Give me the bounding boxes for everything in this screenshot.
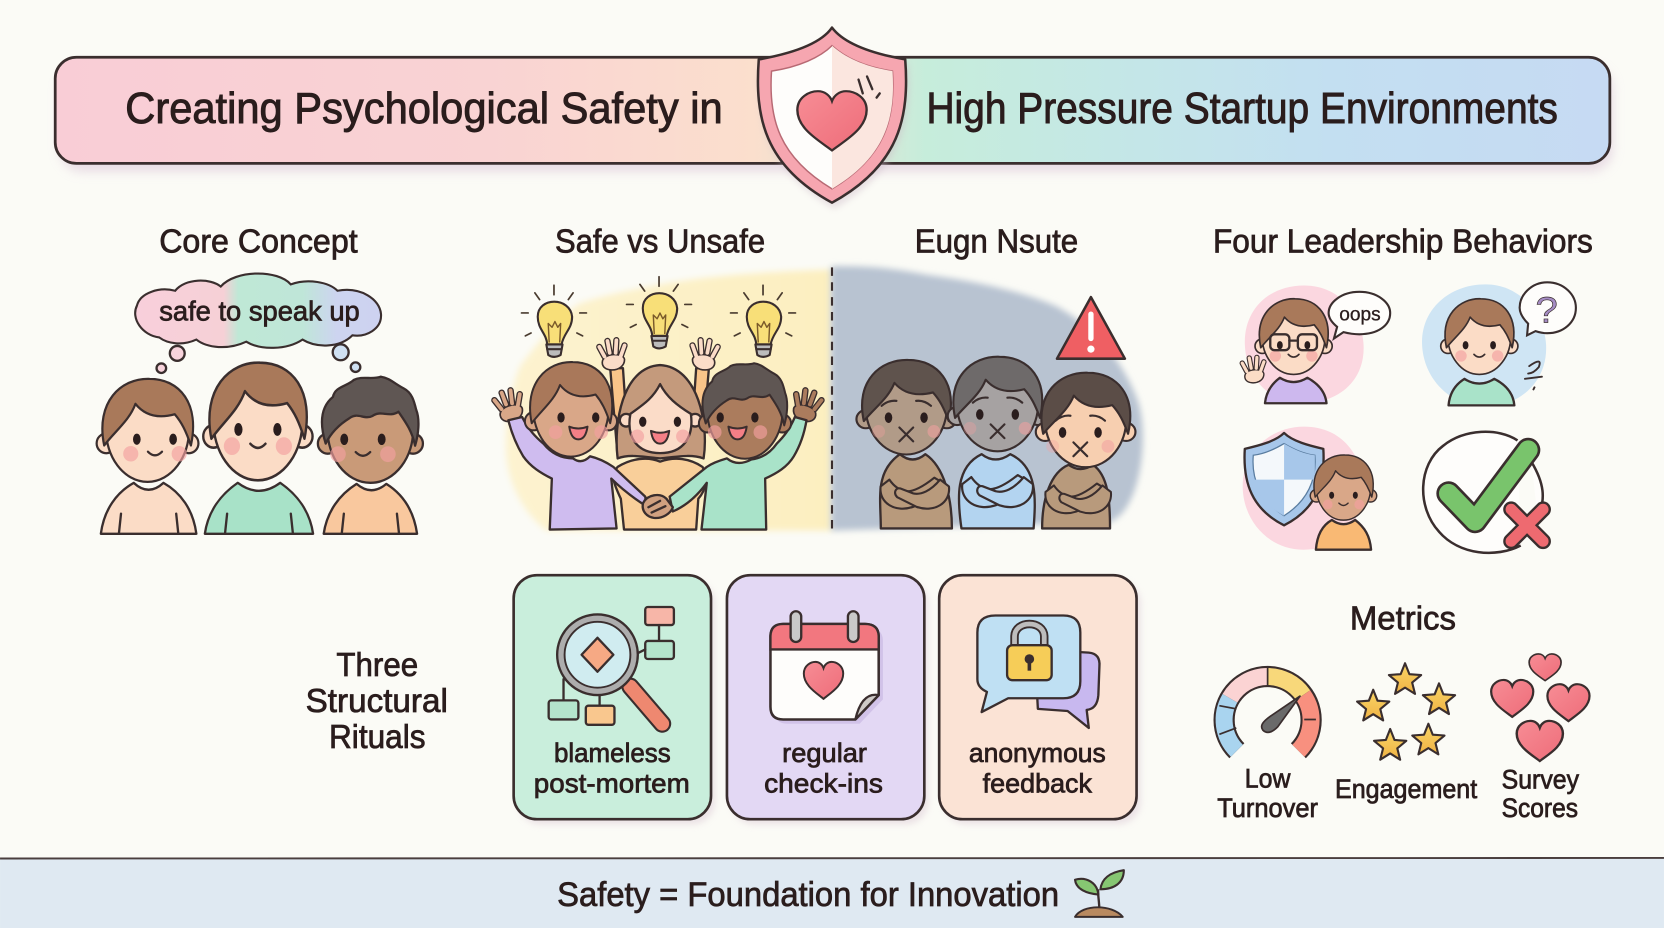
heading: metrics: Metrics <box>1350 599 1456 636</box>
metric: low turnover gauge: Low <box>1245 763 1291 793</box>
card: blameless post-mortem <box>514 575 715 825</box>
card: regular check-ins: regular <box>782 738 867 768</box>
speech bubble: question mark: ? <box>1536 290 1558 331</box>
handshake <box>643 495 673 518</box>
metric: survey scores hearts <box>1491 654 1590 823</box>
metric: engagement stars: Engagement <box>1335 774 1478 804</box>
person: unsafe right <box>1036 373 1135 528</box>
icon: warning triangle <box>1057 297 1125 359</box>
person: left raising arm <box>493 362 646 530</box>
person: middle <box>203 363 313 534</box>
panel: unsafe side <box>831 266 1143 531</box>
card: blameless post-mortem: blameless <box>554 738 671 768</box>
metric: engagement stars <box>1335 663 1478 804</box>
behavior: admit mistakes <box>1242 285 1390 403</box>
yellow glow background <box>506 270 832 531</box>
panel: four leadership behaviors <box>1242 282 1576 553</box>
metric: low turnover gauge <box>1217 667 1318 823</box>
card: regular check-ins: check-ins <box>764 769 883 799</box>
heading: three structural rituals <box>306 646 448 755</box>
person: girl centre <box>599 340 718 530</box>
heading: safe vs unsafe: Safe vs Unsafe <box>555 223 765 260</box>
title left: Creating Psychological Safety in <box>125 85 723 133</box>
card: anonymous feedback: feedback <box>983 769 1093 799</box>
card: regular check-ins <box>727 575 929 825</box>
card: anonymous feedback: anonymous <box>969 738 1106 768</box>
speech bubble: question mark <box>1520 282 1576 335</box>
person: unsafe middle <box>948 357 1047 528</box>
thought cloud: safe to speak up <box>159 295 360 326</box>
footer band <box>0 858 1664 928</box>
person: left <box>97 379 198 534</box>
behavior: ask questions <box>1422 282 1576 406</box>
person: right raising arm <box>670 363 823 530</box>
heading: three structural rituals: Three <box>336 646 418 683</box>
title right: High Pressure Startup Environments <box>926 85 1558 133</box>
card: anonymous feedback <box>939 575 1141 825</box>
icon: calendar with heart <box>770 611 883 724</box>
card: blameless post-mortem: post-mortem <box>534 769 690 799</box>
blue-grey shadow background <box>831 266 1143 531</box>
behavior: protect the team <box>1243 427 1377 550</box>
panel: core concept <box>97 274 423 534</box>
person: right <box>318 377 423 534</box>
metric: survey scores hearts: Scores <box>1502 793 1578 823</box>
icon: magnifier with flow chart <box>549 607 674 725</box>
behavior: check and cross <box>1423 432 1543 553</box>
divider: dashed line <box>831 267 833 532</box>
metric: survey scores hearts: Survey <box>1502 764 1580 794</box>
speech bubble: oops <box>1329 292 1390 339</box>
heading: three structural rituals: Structural <box>306 682 448 719</box>
thought cloud <box>135 274 381 373</box>
footer message: Safety = Foundation for Innovation <box>557 876 1059 914</box>
icon: sprout <box>1075 870 1124 917</box>
panel: safe side <box>493 270 832 531</box>
icon: speech bubbles with lock <box>977 615 1100 728</box>
speech bubble: oops: oops <box>1339 304 1381 325</box>
person: unsafe left <box>856 360 956 528</box>
icon: blue shield <box>1245 433 1324 525</box>
light bulbs <box>521 277 795 357</box>
title banner <box>55 28 1613 209</box>
heading: four leadership behaviors: Four Leadership Behaviors <box>1213 223 1593 260</box>
icon: shield with heart <box>758 28 909 209</box>
heading: three structural rituals: Rituals <box>329 718 426 755</box>
metric: low turnover gauge: Turnover <box>1217 793 1318 823</box>
heading: garbled unsafe label: Eugn Nsute <box>915 223 1078 260</box>
heading: core concept: Core Concept <box>159 223 358 260</box>
